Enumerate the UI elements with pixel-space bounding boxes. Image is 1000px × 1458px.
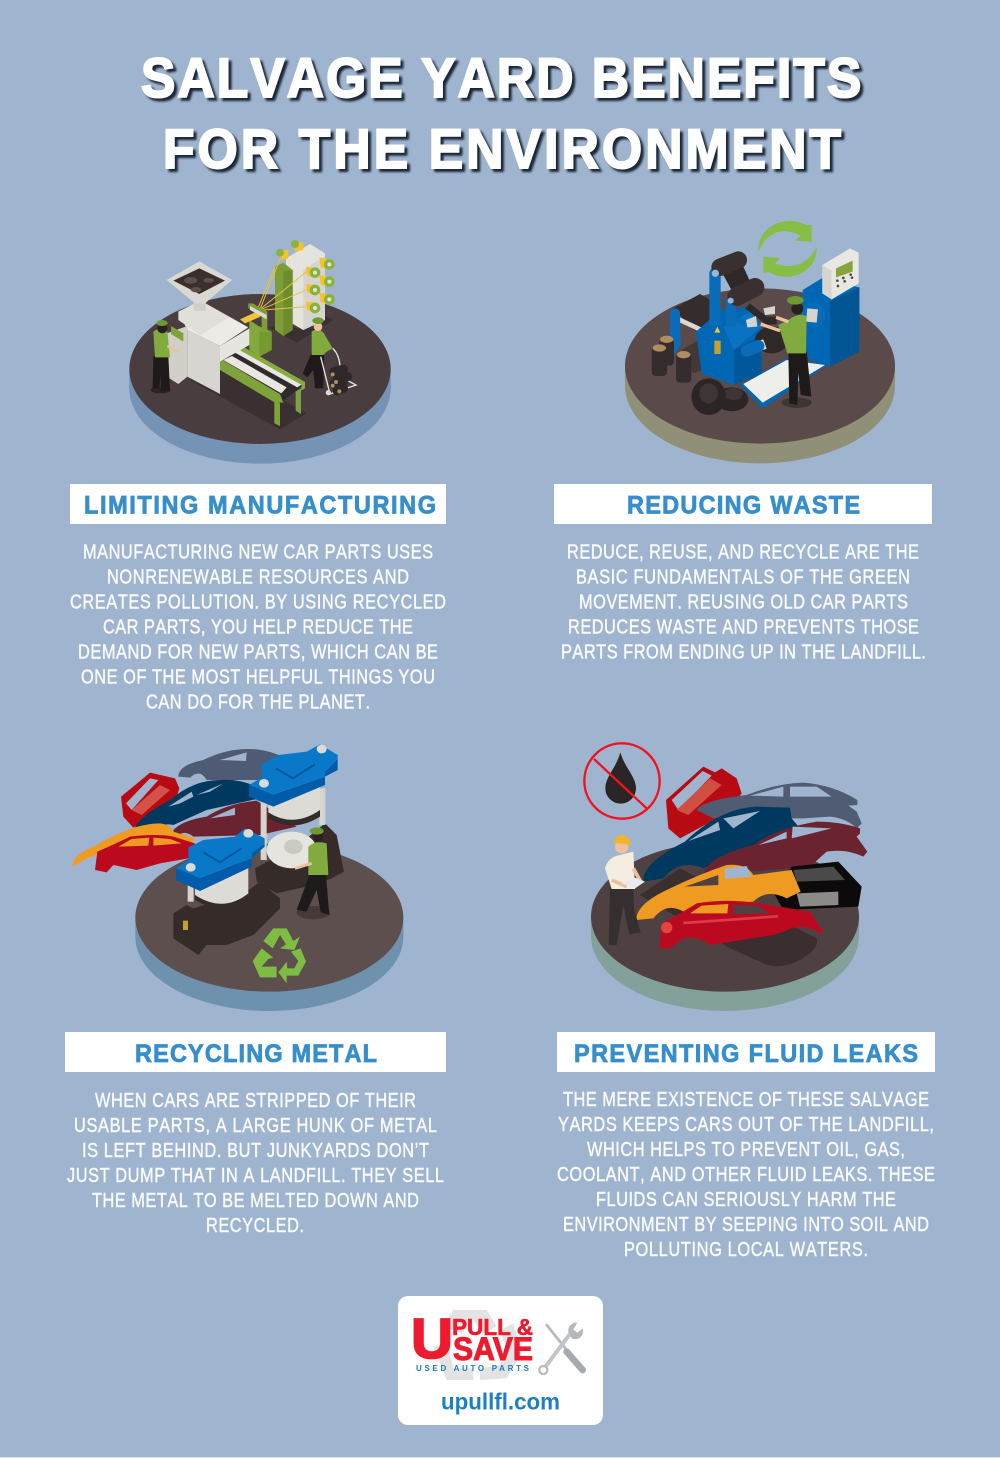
text block: limiting manufacturing: CAR PARTS, YOU HELP REDUCE THE	[103, 615, 413, 638]
text block: reducing waste: MOVEMENT. REUSING OLD CAR PARTS	[579, 590, 908, 613]
text block: reducing waste	[561, 540, 926, 663]
text block: preventing fluid leaks: THE MERE EXISTENCE OF THESE SALVAGE	[563, 1087, 929, 1110]
panel: recycling metal	[65, 744, 446, 1236]
inspector	[605, 835, 645, 945]
heading: limiting manufacturing	[70, 484, 446, 524]
text block: recycling metal	[67, 1088, 444, 1236]
text block: reducing waste: PARTS FROM ENDING UP IN THE LANDFILL.	[561, 640, 926, 663]
text block: recycling metal: IS LEFT BEHIND. BUT JUNKYARDS DON’T	[82, 1138, 429, 1161]
title	[141, 47, 861, 180]
heading: reducing waste	[554, 484, 932, 524]
machine rollers and frame	[670, 260, 788, 385]
icon: green cycle arrows	[758, 221, 817, 277]
white mat	[741, 358, 828, 408]
text block: recycling metal: USABLE PARTS, A LARGE HUNK OF METAL	[74, 1113, 437, 1136]
car bodies	[636, 767, 867, 948]
front press	[173, 828, 280, 955]
icon: no oil sign	[584, 743, 660, 819]
heading: preventing fluid leaks	[557, 1032, 935, 1072]
machine	[167, 261, 249, 394]
text block: preventing fluid leaks: FLUIDS CAN SERIOUSLY HARM THE	[596, 1187, 896, 1210]
text block: reducing waste: REDUCE, REUSE, AND RECYCLE ARE THE	[567, 540, 919, 563]
text block: limiting manufacturing: NONRENEWABLE RESOURCES AND	[107, 565, 409, 588]
car bodies	[73, 749, 297, 872]
text block: preventing fluid leaks: POLLUTING LOCAL WATERS.	[624, 1237, 868, 1260]
text block: recycling metal: JUST DUMP THAT IN A LANDFILL. THEY SELL	[67, 1163, 444, 1186]
logo wordmark: U	[411, 1307, 453, 1371]
heading: recycling metal: RECYCLING METAL	[135, 1040, 377, 1068]
green feeder	[240, 303, 272, 357]
logo wordmark: SAVE	[453, 1331, 533, 1367]
illustration: manufacturing plant on disc	[129, 240, 391, 464]
text block: limiting manufacturing: MANUFACTURING NEW CAR PARTS USES	[83, 540, 433, 563]
illustration: scrapped cars and inspector on disc	[584, 743, 867, 1011]
conveyor	[220, 346, 305, 426]
panel: reducing waste	[554, 221, 932, 663]
logo wordmark: USED AUTO PARTS	[416, 1364, 530, 1373]
panel: preventing fluid leaks	[557, 743, 935, 1260]
logo card	[398, 1296, 603, 1425]
text block: limiting manufacturing: CAN DO FOR THE PLANET.	[146, 690, 370, 713]
text block: limiting manufacturing	[70, 540, 446, 713]
logo wordmark: PULL &	[452, 1314, 533, 1340]
text block: recycling metal: RECYCLED.	[206, 1213, 304, 1236]
heading: reducing waste: REDUCING WASTE	[627, 492, 860, 520]
text block: preventing fluid leaks: WHICH HELPS TO PREVENT OIL, GAS,	[587, 1137, 905, 1160]
heading: preventing fluid leaks: PREVENTING FLUID LEAKS	[574, 1040, 918, 1068]
text block: preventing fluid leaks: YARDS KEEPS CARS OUT OF THE LANDFILL,	[558, 1112, 934, 1135]
text block: preventing fluid leaks: COOLANT, AND OTHER FLUID LEAKS. THESE	[557, 1162, 935, 1185]
icon: crossed wrench and screwdriver	[539, 1323, 583, 1374]
worker	[295, 827, 330, 919]
text block: limiting manufacturing: DEMAND FOR NEW PARTS, WHICH CAN BE	[78, 640, 438, 663]
worker	[761, 296, 812, 408]
illustration: car bodies and metal press on disc	[73, 744, 403, 1011]
text block: recycling metal: WHEN CARS ARE STRIPPED OF THEIR	[95, 1088, 416, 1111]
text block: recycling metal: THE METAL TO BE MELTED DOWN AND	[92, 1188, 419, 1211]
worker with hand truck	[303, 317, 356, 395]
control tower	[801, 248, 859, 367]
worker at control panel	[151, 320, 178, 393]
icon: grey recycling mark	[433, 1310, 522, 1380]
oil drums	[652, 336, 691, 383]
text block: preventing fluid leaks	[557, 1087, 935, 1260]
tyres	[691, 378, 748, 415]
spool rack	[258, 240, 335, 336]
text block: limiting manufacturing: CREATES POLLUTION. BY USING RECYCLED	[70, 590, 446, 613]
heading: limiting manufacturing: LIMITING MANUFACTURING	[84, 492, 436, 520]
icon: recycling symbol	[253, 928, 306, 983]
text block: preventing fluid leaks: ENVIRONMENT BY SEEPING INTO SOIL AND	[563, 1212, 929, 1235]
text block: limiting manufacturing: ONE OF THE MOST HELPFUL THINGS YOU	[81, 665, 435, 688]
text block: reducing waste: BASIC FUNDAMENTALS OF THE GREEN	[576, 565, 910, 588]
panel: limiting manufacturing	[70, 240, 446, 713]
logo wordmark	[411, 1307, 533, 1373]
title: SALVAGE YARD BENEFITS	[141, 47, 861, 109]
illustration: tyre recycling machine on disc	[625, 221, 895, 463]
text block: reducing waste: REDUCES WASTE AND PREVENTS THOSE	[568, 615, 919, 638]
rear press	[249, 744, 344, 893]
title: FOR THE ENVIRONMENT	[163, 118, 841, 180]
heading: recycling metal	[65, 1032, 446, 1072]
website url: upullfl.com	[441, 1388, 560, 1414]
